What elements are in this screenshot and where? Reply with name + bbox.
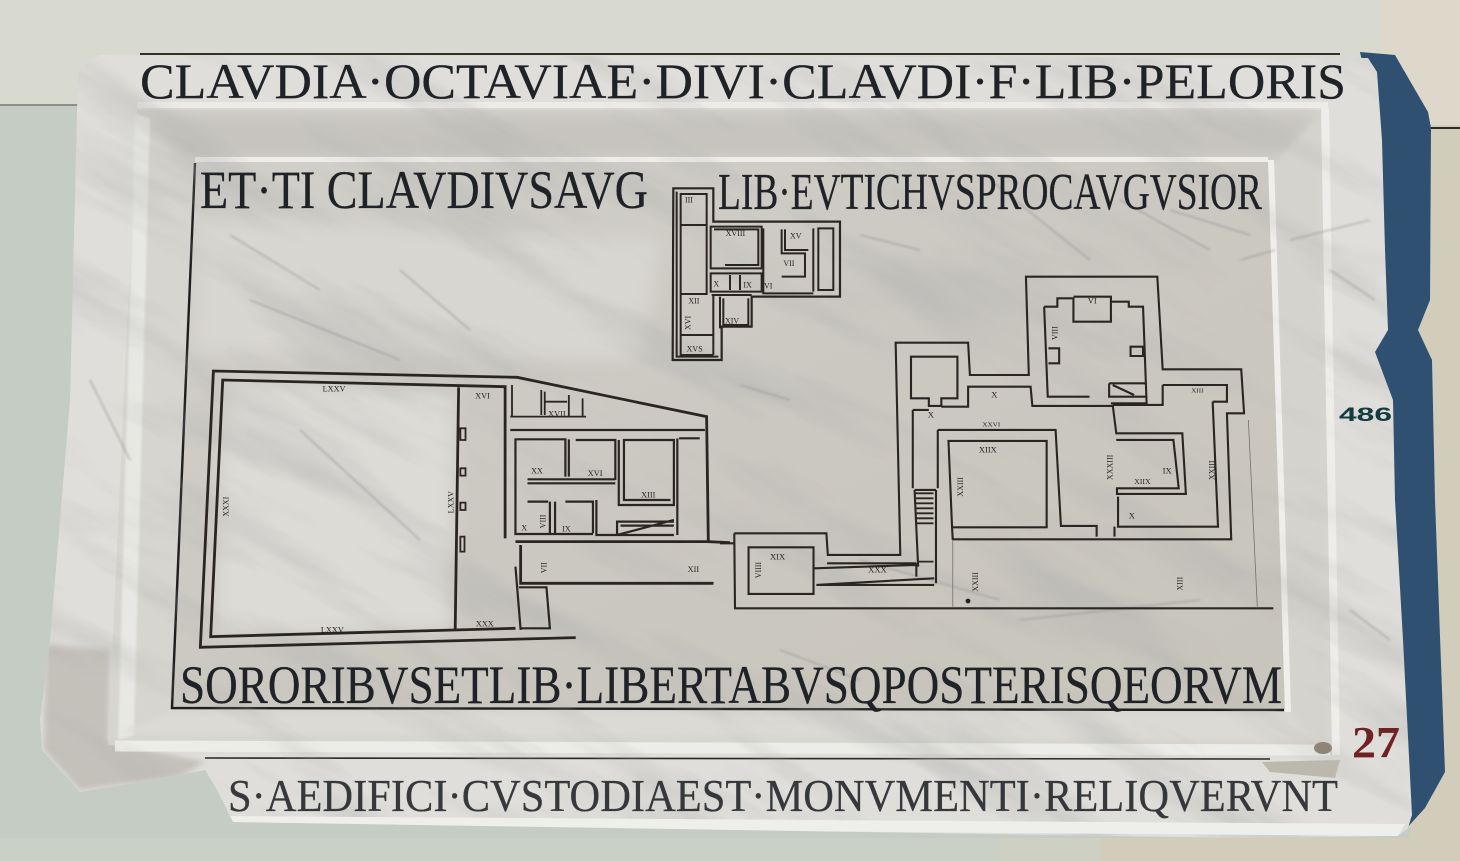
plan: right complex: XXIII [1207, 460, 1217, 480]
plan: right complex: X [1129, 512, 1135, 520]
slab shadow [1360, 52, 1445, 830]
plan: upper complex: XII [688, 296, 700, 305]
plan: left complex: XVI [475, 391, 490, 400]
bottom lip [225, 816, 1405, 836]
plan: upper complex: XV [790, 231, 802, 240]
inscription line 2 right: LIB·EVTICHVSPROCAVGVSIOR [718, 164, 1262, 221]
punched dot [966, 599, 970, 603]
plan: right complex [720, 277, 1273, 608]
plan: right complex: X [928, 411, 934, 419]
plan: upper complex [673, 188, 840, 360]
catalogue number 27: 27 [1352, 718, 1400, 767]
moulding lower band [120, 714, 1320, 740]
plan: right complex: XIII [1175, 577, 1184, 591]
plan: left complex: XX [531, 466, 543, 475]
plan: right complex: XXVI [982, 422, 1001, 429]
plan: right complex: X [991, 391, 998, 399]
field dark edge [172, 163, 1284, 710]
moulding dark lower groove [135, 730, 1310, 736]
moulding right band [1274, 118, 1326, 740]
plan: left complex: XII [688, 565, 699, 574]
plan: upper complex: IX [743, 280, 752, 289]
plan: upper complex: VI [764, 281, 773, 290]
bright floor patches [215, 385, 455, 635]
moulding band [108, 110, 1338, 755]
field ridge [1268, 160, 1291, 712]
inscription line 2 left: ET·TI CLAVDIVSAVG [200, 160, 648, 220]
slab top shadow line [140, 53, 1340, 55]
plan: right complex: VIII [1050, 326, 1059, 340]
plan: right complex: XIIX [979, 446, 997, 455]
plan: upper complex: VII [783, 259, 795, 268]
plan: right complex: VIIII [754, 562, 763, 578]
plan: left complex: IX [562, 525, 571, 534]
worn bottom right [1262, 760, 1340, 778]
plan: left complex: XIII [641, 490, 656, 499]
plan: left complex: XXXI [221, 496, 231, 517]
plan: right complex: XIX [770, 553, 785, 561]
plan: right complex: XIIX [1134, 477, 1151, 486]
plan: right complex: XIII [1191, 388, 1204, 395]
plan: left complex: X [521, 524, 527, 533]
plan: right complex: XXIII [956, 477, 965, 497]
plan: upper complex: XIV [725, 316, 739, 325]
plan: upper complex: X [713, 280, 719, 289]
plan: left complex: XVI [588, 469, 603, 478]
plan: right complex: VI [1088, 297, 1097, 305]
plan: right complex: XXX [868, 566, 887, 575]
catalogue number 486: 486 [1339, 405, 1392, 426]
inscription line 3: SORORIBVSETLIB·LIBERTABVSQPOSTERISQEORVM [180, 655, 1282, 715]
plan: left complex: XVII [548, 410, 566, 419]
lower strip divider [205, 758, 1270, 759]
moulding left bright ridge [118, 114, 150, 740]
plan: right complex: IX [1163, 467, 1172, 475]
moulding top darker band [145, 113, 1320, 160]
plan: left complex: XXX [476, 620, 494, 629]
recessed field [170, 160, 1285, 710]
plan: upper complex: III [685, 195, 693, 204]
plan: left complex: VII [539, 562, 548, 573]
worn lower left corner [44, 645, 205, 790]
plan: upper complex: XVIII [726, 229, 746, 238]
plan: upper complex: XVI [684, 315, 693, 330]
plan: upper complex: XVS [687, 345, 703, 354]
plan: left complex: VIII [538, 514, 547, 528]
plan: left complex: LXXV [323, 385, 346, 394]
inscription line 1: CLAVDIA·OCTAVIAE·DIVI·CLAVDI·F·LIB·PELORIS [140, 53, 1346, 109]
inscription line 4: S·AEDIFICI·CVSTODIAEST·MONVMENTI·RELIQVERVNT [228, 770, 1338, 821]
plan: right complex: XXIII [971, 572, 980, 592]
plan: left complex [200, 371, 730, 647]
plan: left complex: LXXV [446, 491, 455, 513]
plan: left complex: LXXV [321, 625, 344, 634]
plan: right complex: XXXIII [1105, 454, 1115, 480]
inventory mark [1314, 742, 1332, 754]
